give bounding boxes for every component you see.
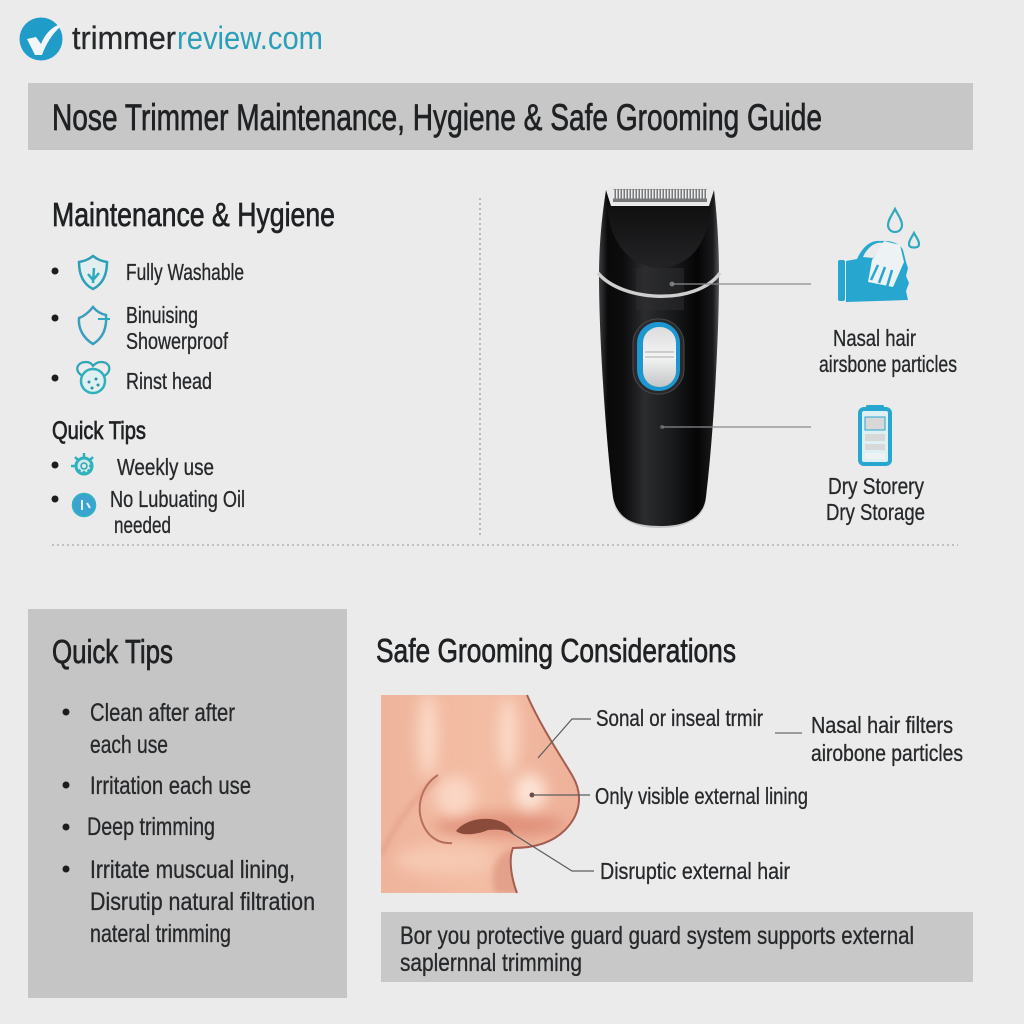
trimmer product illustration bbox=[598, 186, 811, 528]
nose illustration bbox=[381, 693, 579, 893]
label: nasal hair bbox=[819, 325, 957, 377]
tip: deep trimming bbox=[62, 813, 215, 841]
heading: quick tips: Quick Tips bbox=[52, 633, 173, 670]
heading: maintenance: Maintenance & Hygiene bbox=[52, 196, 335, 233]
list item: fully washable bbox=[52, 256, 244, 289]
tip: clean after use: each use bbox=[90, 731, 168, 759]
list item: showerproof: Binuising bbox=[126, 302, 198, 328]
list item: no lubricating oil: No Lubuating Oil bbox=[110, 486, 245, 512]
trimmer silver ring bbox=[598, 273, 720, 296]
trimmer base ring bbox=[613, 500, 706, 528]
list item: no lubricating oil bbox=[52, 486, 245, 538]
callout: only visible: Only visible external lining bbox=[595, 783, 808, 809]
tip: irritate lining: nateral trimming bbox=[90, 920, 231, 948]
caption banner: saplernnal trimming bbox=[400, 949, 582, 977]
trimmer body bbox=[599, 190, 719, 527]
logo bbox=[20, 18, 323, 60]
tip: irritate lining: Irritate muscual lining, bbox=[90, 856, 295, 884]
caption banner: Bor you protective guard guard system supports external bbox=[400, 922, 914, 950]
logo wordmark: trimmer bbox=[72, 20, 176, 56]
nostril wing outline bbox=[420, 775, 452, 843]
label: dry storage: Dry Storery bbox=[828, 473, 924, 499]
callout: nasal hair filters: airobone particles bbox=[811, 740, 963, 766]
trimmer button bbox=[633, 319, 684, 394]
label: dry storage bbox=[826, 473, 925, 525]
tip: clean after use bbox=[62, 699, 235, 759]
title banner bbox=[28, 83, 973, 150]
callout: sonal bbox=[538, 705, 763, 758]
heading: safe grooming considerations: Safe Grooming Considerations bbox=[376, 632, 736, 669]
logo wordmark bbox=[72, 20, 323, 56]
callout: sonal: Sonal or inseal trmir bbox=[596, 705, 763, 731]
callout: nasal hair filters bbox=[775, 712, 963, 766]
list item: rinse head bbox=[52, 362, 212, 394]
icon: washing hand with drops bbox=[838, 209, 919, 302]
callout: disruptic bbox=[510, 832, 790, 884]
panel: quick tips bbox=[28, 609, 347, 998]
tip: irritate lining bbox=[62, 856, 315, 948]
leader line: lower bbox=[660, 425, 811, 429]
callout: disruptic: Disruptic external hair bbox=[600, 858, 790, 884]
leader line: upper bbox=[670, 282, 811, 286]
list item: showerproof: Showerproof bbox=[126, 328, 228, 354]
list item: weekly use bbox=[52, 453, 214, 480]
trimmer side highlights bbox=[636, 268, 684, 310]
label: dry storage: Dry Storage bbox=[826, 499, 925, 525]
subheading: quick tips: Quick Tips bbox=[52, 417, 146, 445]
nostril bbox=[456, 819, 514, 834]
callout: nasal hair filters: Nasal hair filters bbox=[811, 712, 953, 738]
icon: battery bbox=[860, 405, 890, 464]
list item: no lubricating oil: needed bbox=[114, 512, 171, 538]
list item: showerproof bbox=[52, 302, 228, 354]
caption banner bbox=[381, 912, 973, 982]
label: nasal hair: airsbone particles bbox=[819, 351, 957, 377]
icon: check badge bbox=[20, 18, 62, 60]
tip: irritation: Irritation each use bbox=[90, 772, 251, 800]
list item: weekly use: Weekly use bbox=[117, 454, 214, 480]
panel: maintenance and hygiene bbox=[52, 196, 335, 538]
tip: deep trimming: Deep trimming bbox=[87, 813, 215, 841]
tip: irritate lining: Disrutip natural filtration bbox=[90, 888, 315, 916]
callout: only visible bbox=[530, 783, 808, 809]
tip: clean after use: Clean after after bbox=[90, 699, 235, 727]
list item: fully washable: Fully Washable bbox=[126, 259, 244, 285]
label: nasal hair: Nasal hair bbox=[833, 325, 916, 351]
list item: rinse head: Rinst head bbox=[126, 368, 212, 394]
trimmer head shoulder bbox=[607, 206, 711, 268]
trimmer blade bbox=[606, 186, 714, 205]
logo wordmark: review.com bbox=[177, 20, 323, 56]
